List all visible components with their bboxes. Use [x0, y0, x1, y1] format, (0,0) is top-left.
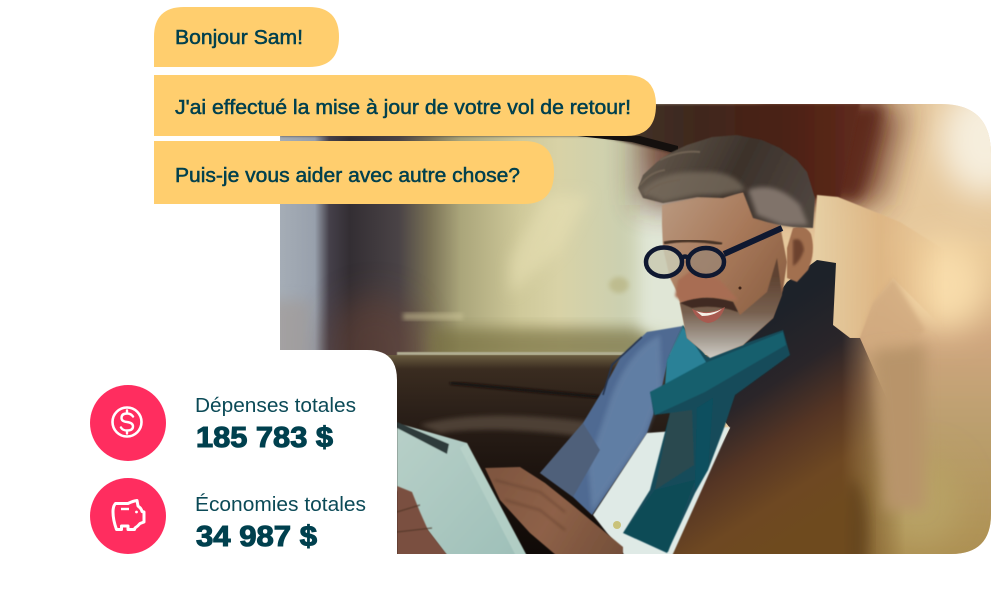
- beard: [680, 258, 782, 358]
- hair: [638, 135, 815, 228]
- stat: total savings: Économies totales: [195, 493, 366, 516]
- face: [662, 192, 787, 357]
- cheek and nose: [674, 272, 735, 302]
- jacket blur into gold: [872, 345, 925, 510]
- car door panel: [386, 355, 709, 554]
- moustache: [680, 298, 738, 312]
- icon: piggy bank: [90, 478, 166, 554]
- mouth: [692, 307, 725, 323]
- chat bubble: flight update: J'ai effectué la mise à jour de votre vol de retour!: [175, 97, 631, 119]
- dark jacket: [665, 260, 905, 556]
- glasses: [646, 228, 782, 276]
- ear: [787, 227, 813, 282]
- right side blurred background: [700, 104, 991, 554]
- window background: [280, 104, 700, 355]
- tablet: [397, 422, 527, 556]
- white shirt: [593, 427, 730, 556]
- stat: total spending: 185 783 $: [196, 422, 333, 454]
- stat: total spending: [195, 395, 356, 454]
- head: [638, 135, 815, 358]
- white stats panel: [280, 350, 397, 554]
- chat bubble: greeting: [154, 7, 339, 67]
- photo: man using a tablet in a car: [280, 104, 991, 554]
- right hand: [485, 467, 623, 556]
- teal scarf: [623, 325, 790, 553]
- seat headrest: [814, 194, 928, 338]
- shirt button: [613, 521, 621, 529]
- blue blazer sleeve: [540, 326, 683, 515]
- icon: dollar coin: [90, 385, 166, 461]
- chat bubble: offer help: Puis-je vous aider avec autre chose?: [175, 165, 520, 187]
- stat: total savings: 34 987 $: [196, 521, 317, 553]
- stat: total spending: Dépenses totales: [195, 395, 356, 417]
- left hand: [397, 486, 448, 556]
- chat bubble: flight update: [154, 75, 656, 136]
- chat bubble: offer help: [154, 141, 554, 204]
- chat bubble: greeting: Bonjour Sam!: [175, 27, 303, 49]
- eyebrow and mole: [664, 241, 722, 244]
- stat: total savings: [195, 493, 366, 553]
- car ceiling: [280, 104, 905, 205]
